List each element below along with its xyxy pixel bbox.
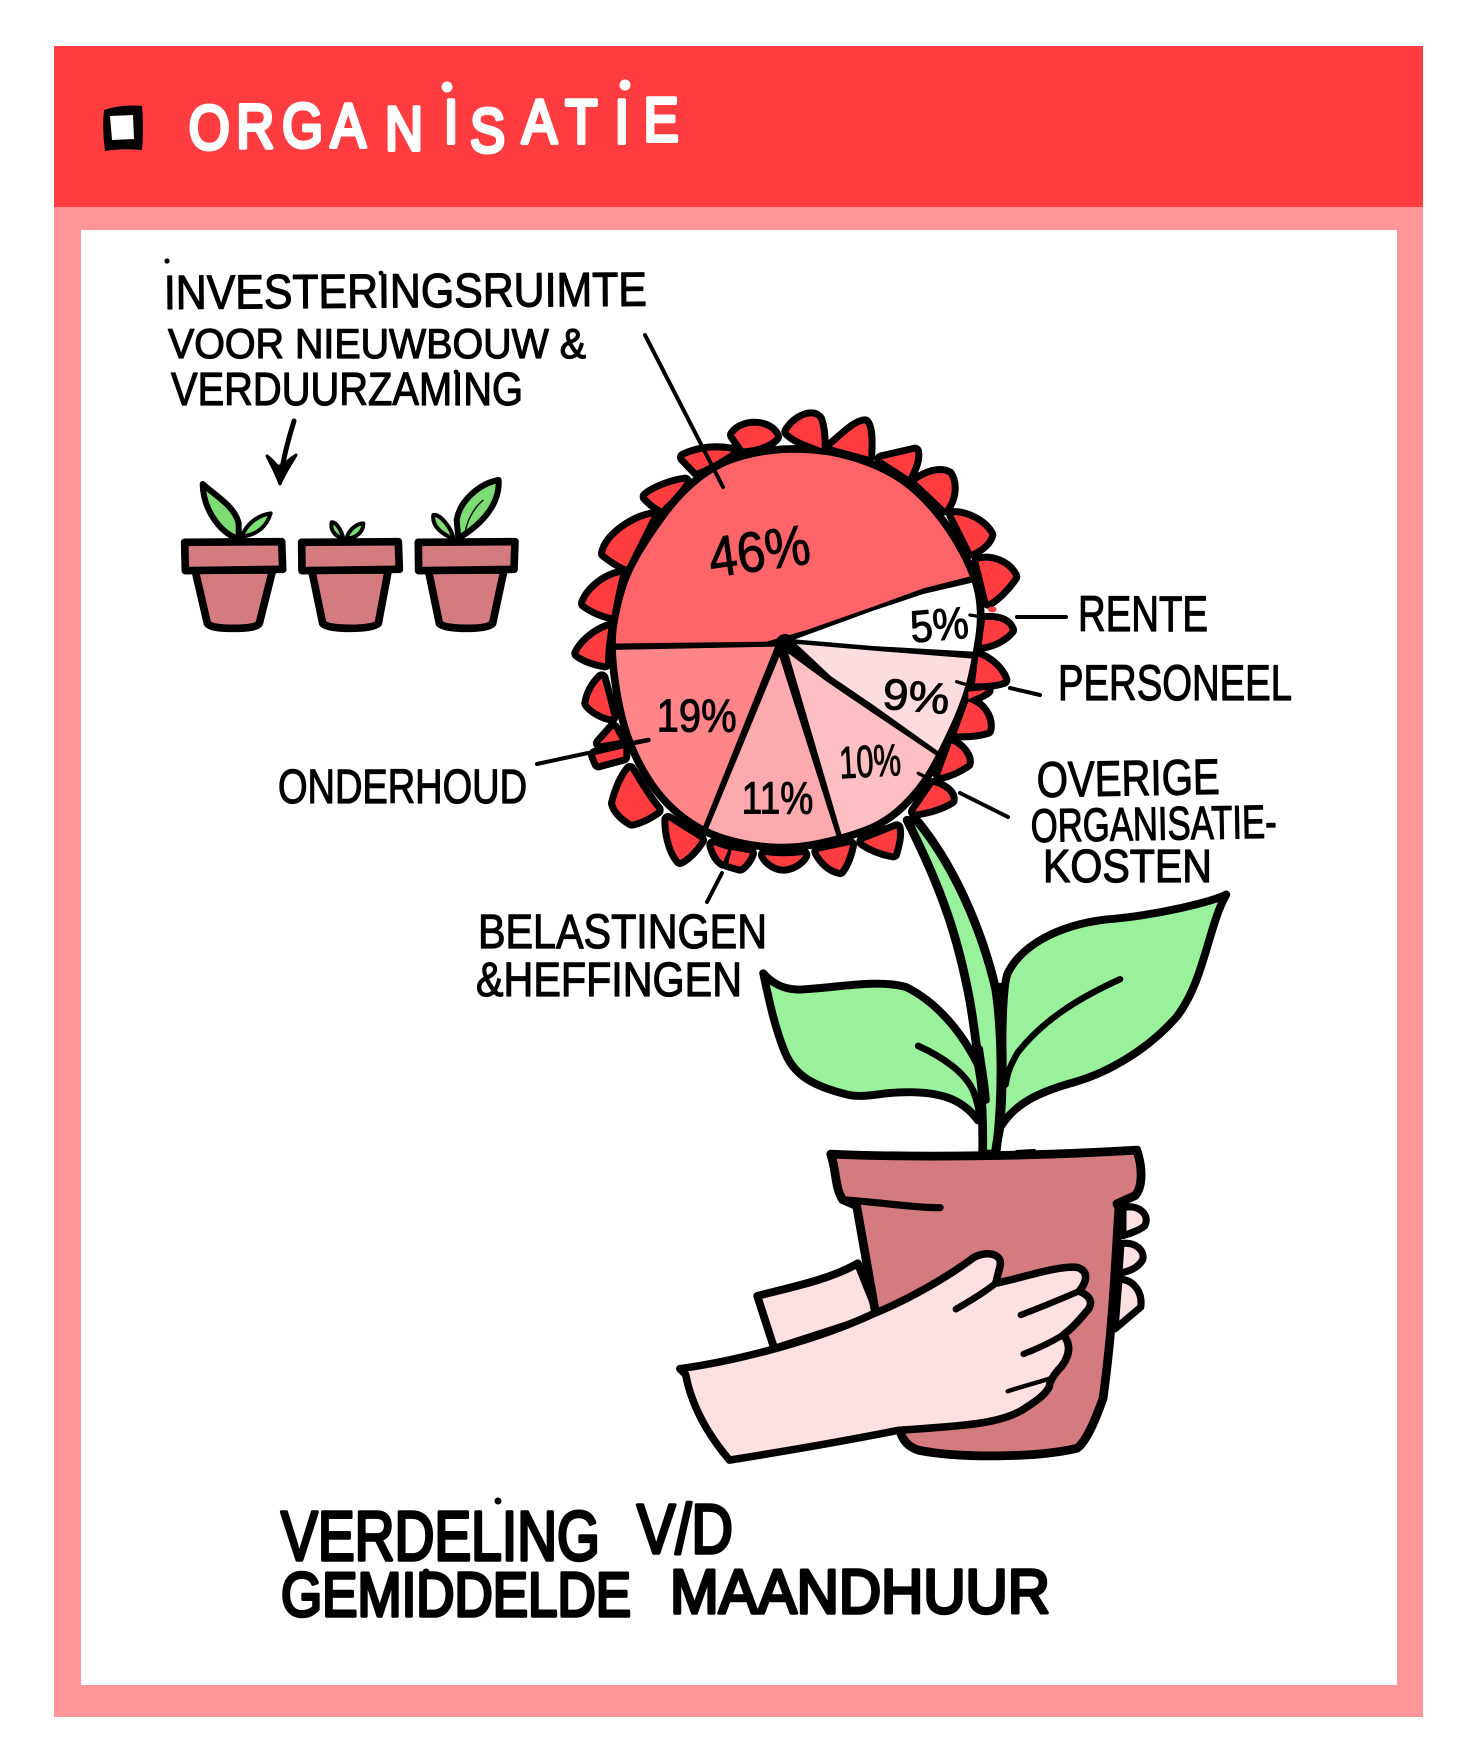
chart title: verdeling van de gemiddelde maandhuur [281,1490,1050,1630]
label: overige organisatiekosten: ORGANISATIE- [1030,795,1277,852]
label: belastingen en heffingen: &HEFFINGEN [476,954,742,1007]
pot 2 [302,522,399,628]
chart: flower pie chart [573,413,1040,880]
front hand and arm [680,1254,1091,1460]
leader ticks inside pie [918,615,980,778]
icon: large plant in pot held by hands [680,820,1226,1460]
label: belastingen en heffingen: BELASTINGEN [478,906,767,959]
rente petal dot [988,606,997,612]
petals [578,416,1013,870]
value: 11%: 11% [742,772,813,823]
label: personeel: PERSONEEL [1058,655,1292,711]
value: 46%: 46% [705,514,814,590]
header band [54,46,1423,207]
text block: investeringsruimte label: INVESTERINGSRUIMTE [164,264,647,320]
back arm [757,1263,878,1349]
large pot [831,1150,1141,1456]
label: belastingen en heffingen [476,873,767,1007]
pie hub [776,634,794,653]
chart title: verdeling van de gemiddelde maandhuur: V/D [637,1490,733,1568]
slice: 9% [796,644,972,751]
label: overige organisatiekosten: KOSTEN [1043,840,1212,892]
label: onderhoud: ONDERHOUD [278,761,527,814]
label: overige organisatiekosten [960,749,1277,892]
text block: investeringsruimte label: VERDUURZAMING [171,363,523,415]
right leaf [996,895,1226,1152]
left leaf [763,973,987,1120]
chart title: verdeling van de gemiddelde maandhuur: MAANDHUUR [670,1558,1050,1627]
slice: 11% [708,656,836,844]
slice: 10% [788,654,936,834]
black ring behind petals [616,453,977,844]
callout leader: investeringsruimte to 46% [645,335,723,487]
value: 19%: 19% [657,690,737,742]
chart title: verdeling van de gemiddelde maandhuur: VERDELING [281,1497,600,1575]
pot 3 [418,480,515,628]
icon: three small pots with seedlings [185,480,515,628]
slice: 5% [795,582,977,652]
label: personeel [1010,655,1292,711]
chart title: verdeling van de gemiddelde maandhuur: GEMIDDELDE [281,1561,631,1630]
soil nub [1014,1149,1037,1156]
text block: investeringsruimte label: VOOR NIEUWBOUW & [168,320,586,367]
slice: 46% [616,452,970,644]
text block: investeringsruimte label [164,258,647,415]
pot 1 [185,484,283,628]
value: 9%: 9% [881,670,951,724]
arrow: to small pots [267,421,296,484]
label: overige organisatiekosten: OVERIGE [1036,749,1220,808]
value: 10%: 10% [838,734,902,788]
icon: header checkbox [103,106,143,151]
stem [907,820,1001,1154]
value: 5%: 5% [908,597,971,653]
back hand fingers [1115,1207,1146,1329]
label: rente: RENTE [1078,586,1208,642]
heading: organisatie: ORGANISATIE [189,86,679,166]
pie slices [616,452,977,844]
slice: 19% [616,646,775,826]
